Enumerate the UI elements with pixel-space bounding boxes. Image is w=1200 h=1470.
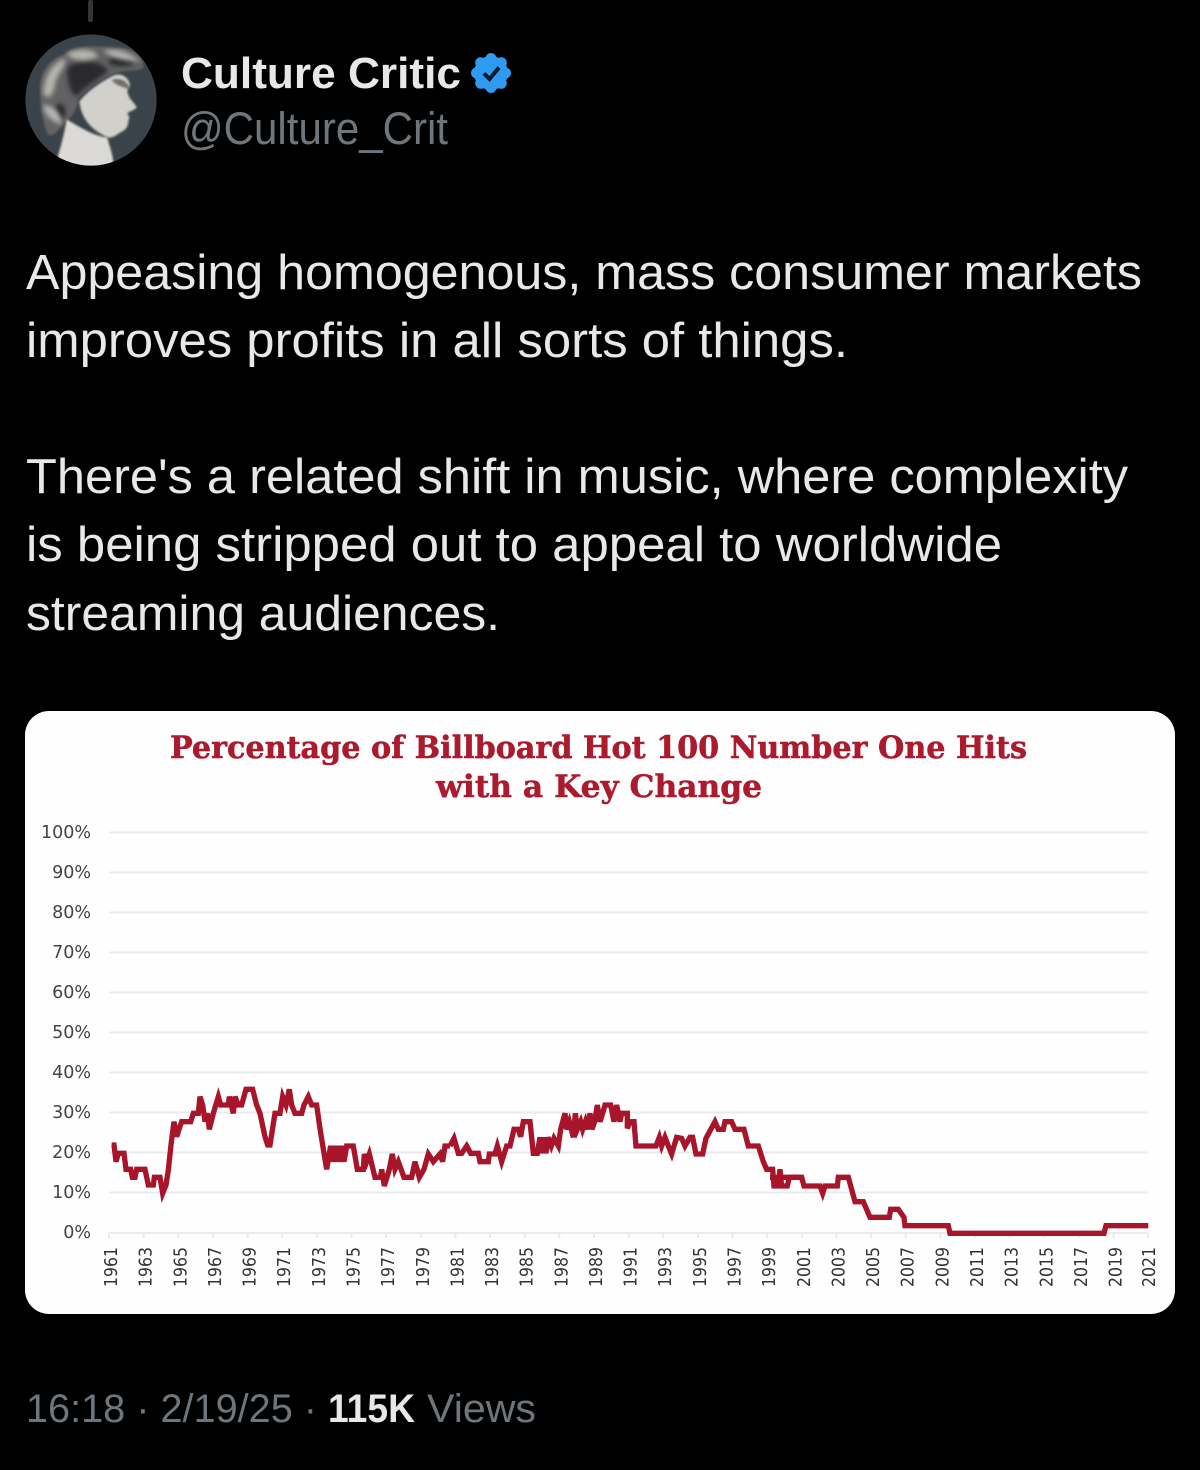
y axis labels: 40% [52, 1063, 91, 1083]
tweet text: streaming audiences. [26, 587, 500, 641]
x axis year labels: 2013 [1003, 1247, 1023, 1287]
y axis gridlines [109, 832, 1148, 1238]
neck and chest [53, 119, 114, 170]
post timestamp and views: 115K [328, 1387, 415, 1431]
y axis labels: 50% [52, 1023, 91, 1043]
x axis year labels: 1997 [726, 1247, 746, 1287]
tweet text: improves profits in all sorts of things. [26, 314, 848, 368]
x axis year labels: 2003 [829, 1247, 849, 1287]
x axis year labels: 2011 [968, 1247, 988, 1287]
x axis year labels: 1985 [518, 1247, 538, 1287]
x axis year labels: 1973 [310, 1247, 330, 1287]
tweet text: Appeasing homogenous, mass consumer markets [26, 246, 1142, 300]
y axis labels: 100% [41, 823, 91, 843]
y axis labels: 60% [52, 983, 91, 1003]
x axis year labels [102, 1247, 1160, 1287]
x axis year labels: 1979 [414, 1247, 434, 1287]
face [79, 75, 137, 138]
x axis year labels: 1989 [587, 1247, 607, 1287]
chart title [170, 730, 1027, 805]
icon: verified badge [471, 53, 511, 93]
post timestamp and views: Views [427, 1387, 536, 1431]
y axis labels: 0% [63, 1223, 91, 1243]
x axis year labels: 2019 [1107, 1247, 1127, 1287]
x axis year labels: 1965 [171, 1247, 191, 1287]
x axis year labels: 2017 [1072, 1247, 1092, 1287]
x axis year labels: 2001 [795, 1247, 815, 1287]
x axis year labels: 1963 [137, 1247, 157, 1287]
light curls [43, 50, 139, 125]
panel: chart card [25, 711, 1175, 1314]
chart title: Percentage of Billboard Hot 100 Number One Hits [170, 730, 1027, 766]
y axis labels: 70% [52, 943, 91, 963]
y axis labels [41, 823, 91, 1243]
x axis year labels: 2009 [933, 1247, 953, 1287]
x axis year labels: 2005 [864, 1247, 884, 1287]
tweet text [26, 246, 1142, 641]
hair mass [40, 46, 143, 135]
x axis year labels: 1971 [275, 1247, 295, 1287]
x axis year labels: 1983 [483, 1247, 503, 1287]
x axis year labels: 1975 [344, 1247, 364, 1287]
x axis year labels: 2015 [1037, 1247, 1057, 1287]
x axis year labels: 1993 [656, 1247, 676, 1287]
icon: avatar statue of David [25, 34, 157, 170]
x axis year labels: 1969 [241, 1247, 261, 1287]
display name: Culture Critic [181, 49, 461, 98]
y axis labels: 90% [52, 863, 91, 883]
x axis year labels: 1987 [552, 1247, 572, 1287]
handle: @Culture_Crit [181, 103, 448, 154]
x axis year labels: 1999 [760, 1247, 780, 1287]
tweet text: There's a related shift in music, where complexity [26, 450, 1129, 504]
x axis year labels: 1967 [206, 1247, 226, 1287]
x axis year labels: 1981 [448, 1247, 468, 1287]
tweet text: is being stripped out to appeal to worldwide [26, 518, 1002, 572]
y axis labels: 10% [52, 1183, 91, 1203]
y axis labels: 80% [52, 903, 91, 923]
chart title: with a Key Change [435, 769, 762, 805]
post timestamp and views: 16:18 · 2/19/25 · [26, 1387, 317, 1431]
x axis year labels: 1995 [691, 1247, 711, 1287]
x axis year labels: 2007 [899, 1247, 919, 1287]
y axis labels: 20% [52, 1143, 91, 1163]
dark hair shadows [55, 57, 135, 120]
thread connector line [88, 0, 93, 22]
brow shadow [112, 79, 130, 89]
post timestamp and views [26, 1387, 536, 1431]
y axis labels: 30% [52, 1103, 91, 1123]
x axis year labels: 1961 [102, 1247, 122, 1287]
x axis year labels: 2021 [1140, 1247, 1160, 1287]
x axis year labels: 1977 [379, 1247, 399, 1287]
line chart: percentage with a key change [112, 1089, 1148, 1233]
x axis year labels: 1991 [622, 1247, 642, 1287]
